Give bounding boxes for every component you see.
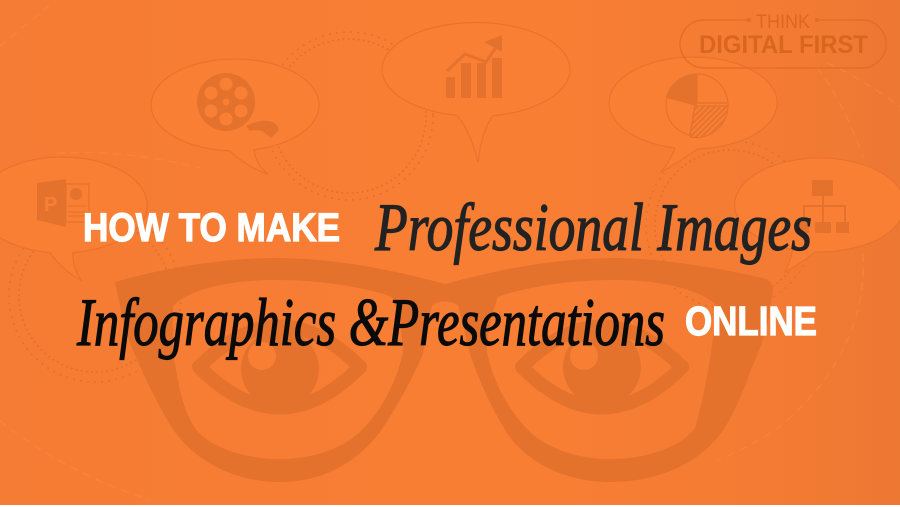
icon: growth chart <box>446 35 502 98</box>
speech bubble: PowerPoint <box>0 157 147 281</box>
speech bubble: org chart <box>735 158 900 272</box>
icon: org chart <box>798 180 849 233</box>
icon: pie chart <box>666 74 728 138</box>
speech bubble: bar chart <box>382 22 570 162</box>
left eye <box>199 326 360 408</box>
heading: Online: ONLINE <box>685 298 817 344</box>
dotted circles <box>9 32 814 382</box>
logo: Think Digital First <box>680 12 886 68</box>
heading: How to make: HOW TO MAKE <box>83 206 340 250</box>
right eye <box>522 326 682 408</box>
icon: PowerPoint <box>37 179 89 227</box>
heading: Infographics & Presentations: Infographics &Presentations <box>76 284 665 360</box>
logo: Think Digital First: THINK <box>756 12 810 33</box>
icon: film reel <box>197 73 278 138</box>
speech bubble: pie chart <box>609 57 777 173</box>
logo: Think Digital First: DIGITAL FIRST <box>699 31 868 59</box>
speech bubble: film reel <box>151 59 319 174</box>
glasses with eyes <box>115 258 773 482</box>
glasses frame <box>115 258 773 482</box>
icon: PowerPoint: P <box>44 194 57 216</box>
